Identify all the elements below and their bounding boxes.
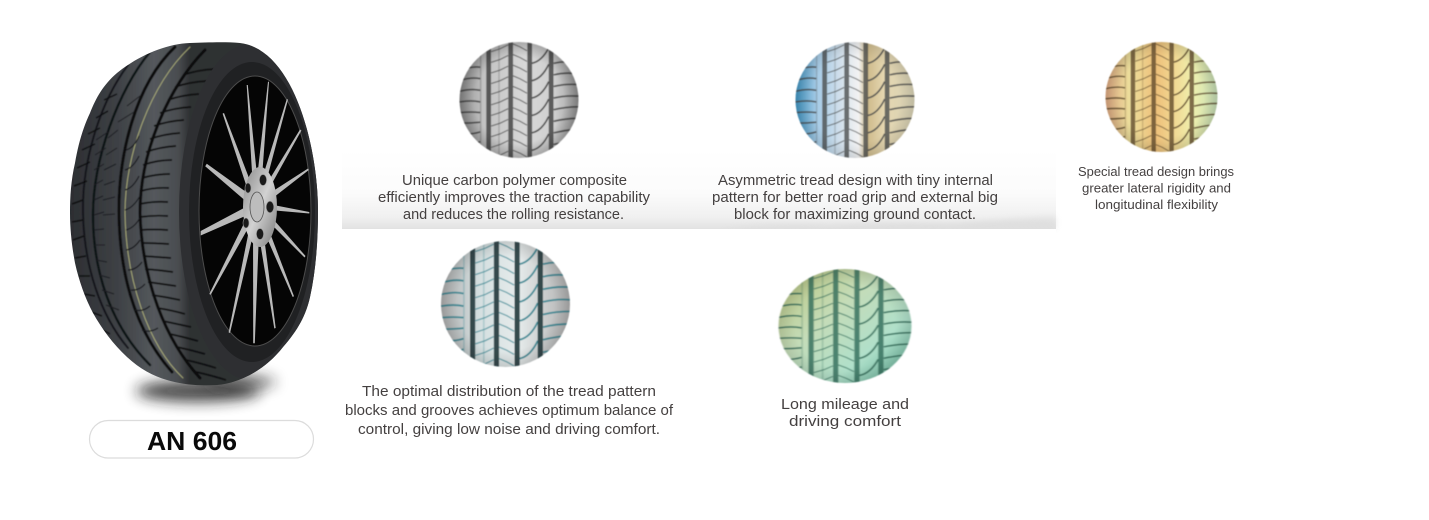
upper rib sipes [103,96,140,215]
text: special tread: longitudinal flexibility [1095,197,1219,212]
feature: optimal distribution [345,241,674,438]
text: special tread: Special tread design brings [1078,164,1234,179]
diagonal rib sipes [125,136,158,331]
feature: carbon polymer composite [378,42,651,223]
model name pill: AN 606 [147,426,237,456]
gradient band behind top text [342,150,1056,241]
text: optimal distribution: blocks and grooves achieves optimum balance of [345,402,674,419]
text: carbon polymer: Unique carbon polymer composite [402,173,627,189]
tire ground shadow [136,375,276,402]
text: special tread: greater lateral rigidity and [1082,180,1231,196]
text: asymmetric tread: block for maximizing ground contact. [734,207,976,223]
icon: teal tread circle [441,241,570,367]
text: long mileage: driving comfort [789,413,902,430]
text: asymmetric tread: pattern for better road grip and external big [712,190,998,206]
text: asymmetric tread: Asymmetric tread design with tiny internal [718,173,993,189]
text: long mileage [781,396,909,430]
text: carbon polymer [378,173,651,223]
wheel spokes [201,82,309,343]
feature: asymmetric tread [712,42,998,223]
text: carbon polymer: efficiently improves the traction capability [378,190,651,206]
text: optimal distribution [345,383,674,438]
feature: long mileage [778,269,911,430]
icon: blue and tan tread circle [796,42,915,158]
wheel rim [199,76,311,346]
model name pill [90,420,314,458]
text: carbon polymer: and reduces the rolling resistance. [403,207,624,223]
tire product image [66,40,322,402]
tire body and tread [66,40,322,390]
left shoulder sipes [72,94,117,334]
center rib sipes [94,132,119,310]
shoulder sipes [140,69,226,380]
sidewall [179,44,321,380]
text: asymmetric tread [712,173,998,223]
text: optimal distribution: The optimal distribution of the tread pattern [362,383,656,400]
feature: special tread design [1078,42,1234,212]
icon: green tread circle [778,269,911,383]
circumferential grooves [83,47,205,378]
text: long mileage: Long mileage and [781,396,909,413]
icon: orange and yellow tread circle [1106,42,1217,152]
wheel hub [243,167,277,247]
text: optimal distribution: control, giving low noise and driving comfort. [358,421,660,438]
icon: grey tread circle [460,42,579,158]
text: special tread [1078,164,1234,212]
